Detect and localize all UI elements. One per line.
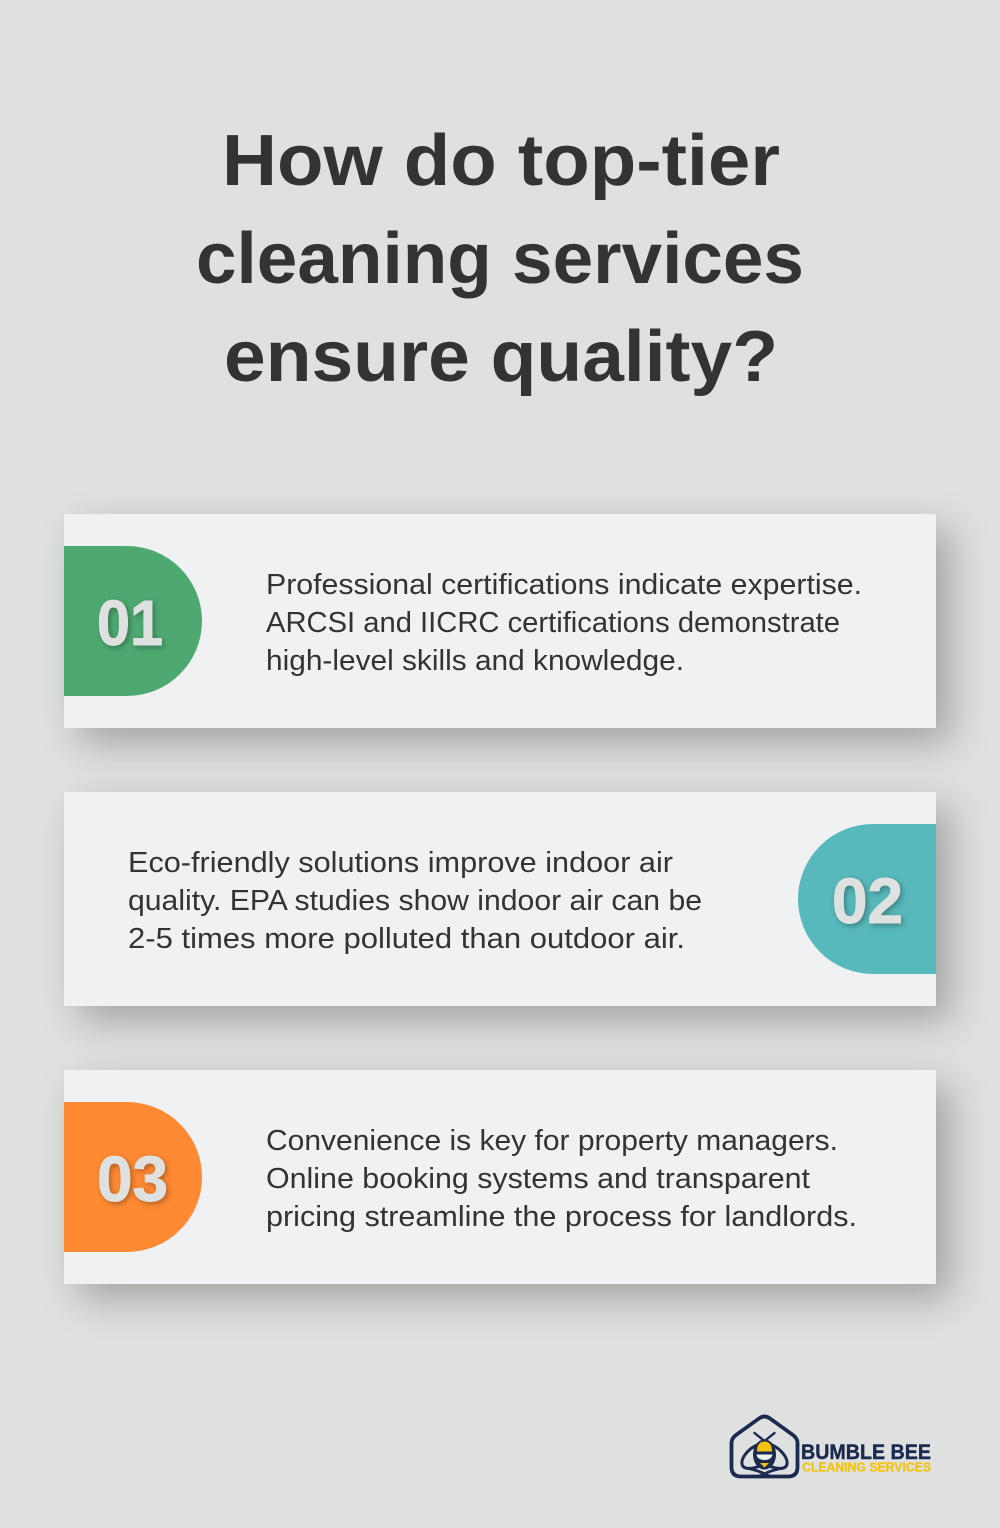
panel: step 02 eco-friendly [64,792,936,1006]
text: certifications: ARCSI and IICRC certifications demonstrate [266,607,840,639]
number: 01: 01 [97,587,163,659]
number: 03: 03 [97,1143,168,1215]
title [196,121,804,397]
badge: 01 [64,546,202,696]
text: CLEANING SERVICES: CLEANING SERVICES [802,1460,931,1474]
text: certifications: high-level skills and knowledge. [266,645,684,677]
badge: 03 [64,1102,202,1252]
number: 02: 02 [832,865,903,937]
text: convenience: pricing streamline the process for landlords. [266,1201,857,1233]
title: ensure quality? [224,317,778,397]
text: convenience: Online booking systems and transparent [266,1163,810,1195]
panel: step 01 certifications [64,514,936,728]
panel: step 03 convenience [64,1070,936,1284]
text: convenience [266,1125,857,1233]
text: BUMBLE BEE: BUMBLE BEE [801,1440,931,1464]
text: certifications [266,569,862,677]
title: How do top-tier [222,121,780,201]
badge: 02 [798,824,936,974]
text: eco-friendly: 2-5 times more polluted than outdoor air. [128,923,685,955]
text: eco-friendly: Eco-friendly solutions improve indoor air [128,847,674,879]
text: certifications: Professional certifications indicate expertise. [266,569,862,601]
icon: bee [742,1433,787,1477]
text: convenience: Convenience is key for property managers. [266,1125,838,1157]
title: cleaning services [196,219,804,299]
text: eco-friendly: quality. EPA studies show indoor air can be [128,885,702,917]
text: eco-friendly [128,847,702,955]
icon: house outline [732,1416,798,1476]
